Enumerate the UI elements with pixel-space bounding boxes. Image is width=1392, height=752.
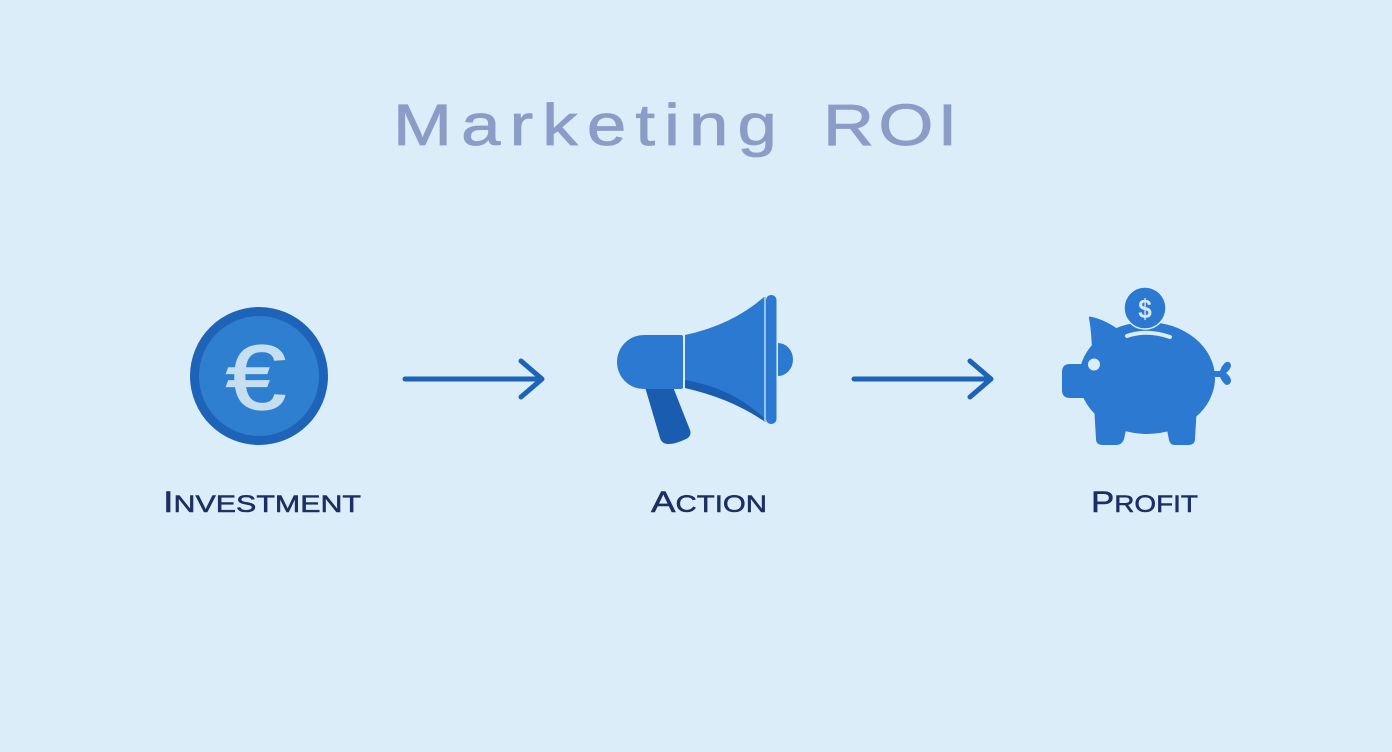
title: Marketing: [393, 92, 786, 158]
arrow: action to profit: [854, 361, 991, 397]
megaphone horn: [685, 297, 764, 421]
label: action: ACTION: [651, 486, 767, 519]
arrow: investment to action: [405, 361, 542, 397]
piggy coin slot: [1127, 333, 1170, 337]
megaphone body: [617, 335, 683, 389]
icon: piggy bank: [1062, 287, 1231, 445]
label: profit: PROFIT: [1091, 486, 1198, 519]
title: ROI: [823, 92, 962, 158]
dollar coin: [1124, 287, 1166, 329]
piggy body: [1062, 317, 1231, 445]
megaphone back cap: [778, 343, 793, 376]
icon: euro coin: [190, 307, 328, 445]
megaphone handle: [645, 387, 690, 444]
icon: euro coin: €: [226, 327, 286, 429]
icon: megaphone: [617, 295, 793, 444]
piggy eye: [1088, 358, 1100, 370]
title: [393, 92, 962, 158]
dollar coin: $: [1138, 295, 1152, 324]
megaphone rim: [764, 295, 776, 424]
megaphone horn shadow: [685, 380, 764, 421]
label: investment: INVESTMENT: [163, 486, 361, 519]
